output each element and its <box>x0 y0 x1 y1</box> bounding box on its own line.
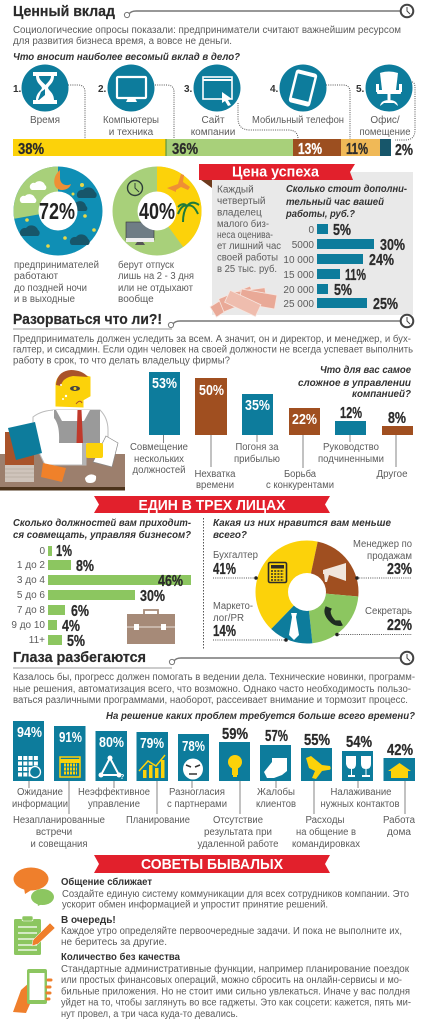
icon: palm <box>178 203 199 222</box>
question: Что для вас самое <box>320 364 411 376</box>
bar chart: positions: 30% <box>140 588 165 605</box>
question: Сколько стоит дополни- <box>286 183 407 195</box>
icon: hand holding phone <box>13 969 51 1013</box>
bar chart: hour price: 0 <box>308 225 314 236</box>
section: eyes wander <box>12 649 416 850</box>
icon: fist <box>264 758 287 778</box>
stacked share bar: 36% <box>172 141 198 158</box>
bar chart: problems: управление <box>88 799 140 810</box>
item 2: computers <box>98 64 159 138</box>
label: accountant <box>213 550 258 580</box>
icon: clipboard with pencil <box>14 916 55 955</box>
bar chart: hour price: 25 000 <box>283 299 314 310</box>
heading: Ценный вклад: Ценный вклад <box>13 3 115 20</box>
label: sales manager <box>353 539 412 580</box>
tip: prioritise <box>14 915 402 955</box>
label: sales manager: Менеджер по <box>353 539 412 550</box>
tip: quantity without quality: нут провел, а три часа куда-то девались. <box>61 1009 238 1020</box>
bar chart: positions: 46% <box>158 573 183 590</box>
bar chart: problems: Налаживание <box>330 787 392 798</box>
bar chart: problems <box>12 721 415 850</box>
item 1: time <box>13 64 68 126</box>
item 3: website <box>184 64 240 138</box>
bar chart: problems: информации <box>12 798 68 810</box>
item 5: office <box>356 64 412 138</box>
bar chart: problems: встречи <box>36 827 72 838</box>
bar chart: hardest in management: Совмещение <box>130 442 188 453</box>
label: sales manager: продажам <box>367 551 412 562</box>
item 5: office: Офис/ <box>370 114 400 126</box>
tip: quantity without quality: бильные приложения. Но не стоит ими сильно увлекаться. Иначе у вас полдня <box>61 986 410 998</box>
bar chart: hour price: 25% <box>373 296 398 313</box>
bar chart: hardest in management: должностей <box>132 465 186 476</box>
side note: Каждый <box>217 184 254 196</box>
label: secretary: 22% <box>387 617 412 634</box>
icon: megaphone <box>323 563 346 582</box>
intro text: Социологические опросы показали: предприниматели считают важнейшим ресурсом <box>13 25 401 36</box>
icon: phone <box>325 607 342 625</box>
icon: grid with clock <box>18 758 40 778</box>
bar chart: problems: 57% <box>265 728 288 745</box>
bar chart: positions: 1% <box>56 543 72 560</box>
bar chart: problems: с партнерами <box>167 799 227 810</box>
ribbon heading <box>199 164 355 188</box>
question <box>213 517 391 541</box>
item 3: website: 3. <box>184 84 193 95</box>
bar chart: hardest in management: 22% <box>292 411 317 428</box>
donut: 40% short vacations <box>112 166 202 305</box>
intro text: ваться различными программами, наоборот, рассеивает внимание и тормозит процесс. <box>13 694 408 706</box>
banner: one in three faces <box>94 496 330 514</box>
bar chart: positions: 8% <box>76 558 94 575</box>
icon: calculator <box>268 562 286 582</box>
tip: communication: Общение сближает <box>61 876 152 888</box>
bar chart: positions: 9 до 10 <box>11 620 45 631</box>
label: sales manager: 23% <box>387 561 412 578</box>
section: valuable contribution <box>13 3 415 159</box>
bar chart: positions: 0 <box>39 546 45 557</box>
item 2: computers: 2. <box>98 84 107 95</box>
intro text <box>13 671 415 706</box>
bar chart: hour price: 5% <box>333 222 351 239</box>
caption: до поздней ночи <box>14 283 87 294</box>
icon: plane <box>306 756 331 779</box>
item 3: website: Сайт <box>201 115 225 126</box>
icon: briefcase <box>127 610 175 644</box>
icon: house <box>388 763 411 778</box>
intro text <box>13 25 401 47</box>
bar chart: positions: 4% <box>62 618 80 635</box>
value 40%: 40% <box>139 198 175 224</box>
icon: office chair <box>376 72 402 106</box>
donut chart: roles <box>255 540 358 643</box>
bar chart: problems: Незапланированные <box>13 815 105 826</box>
tip: communication: Создайте единую систему коммуникации для всех сотрудников компании. Это <box>62 889 409 900</box>
bar chart: hour price <box>283 222 405 313</box>
question: ся совмещать, управляя бизнесом? <box>13 529 192 541</box>
intro text: работу в срок, то что делать владельцу фирмы? <box>13 354 230 366</box>
bar chart: hardest in management: Погоня за <box>236 442 279 453</box>
label: secretary <box>335 606 412 636</box>
caption: и в выходные <box>14 294 75 305</box>
icon: tie <box>289 613 299 640</box>
tip: quantity without quality: Стандартные административные функции, например планирование поездок <box>61 963 410 975</box>
bar chart: hour price: 5% <box>334 282 352 299</box>
panel: price of success <box>199 164 413 317</box>
bar chart: problems: результата при <box>204 827 272 838</box>
icon: moon <box>54 170 71 190</box>
bar chart: problems: Неэффективное <box>78 786 150 798</box>
item 5: office: помещение <box>360 127 411 138</box>
side note <box>217 184 281 275</box>
timeline line with clock <box>13 652 413 668</box>
bar chart: problems: 91% <box>59 729 82 746</box>
icons: clouds and stars <box>20 181 97 248</box>
bar chart: problems: командировках <box>292 839 360 850</box>
caption: или не отдыхают <box>118 283 193 294</box>
label: accountant: Бухгалтер <box>213 550 258 561</box>
bar chart: problems: нужных контактов <box>320 799 400 810</box>
intro text <box>13 333 413 366</box>
bar chart: hour price: 30% <box>380 237 405 254</box>
section: torn apart <box>0 311 413 491</box>
side note: владелец <box>217 208 262 218</box>
bar chart: hardest in management <box>130 372 413 491</box>
bar chart: problems: 59% <box>222 726 248 743</box>
bar chart: problems: 55% <box>304 732 330 749</box>
tip: prioritise: не беритесь за другие. <box>61 936 167 948</box>
bar chart: positions: 5 до 6 <box>17 590 45 601</box>
bar chart: hardest in management: 50% <box>199 382 224 399</box>
bar chart: problems: Отсутствие <box>213 815 263 826</box>
icon: wine glasses <box>346 756 371 777</box>
heading: Разорваться что ли?!: Разорваться что ли?! <box>13 311 162 328</box>
icon: light bulb <box>228 755 242 777</box>
value 72%: 72% <box>39 198 75 224</box>
intro text: для развития бизнеса время, а вовсе не деньги. <box>13 35 232 47</box>
bar chart: hour price: 10 000 <box>283 255 314 266</box>
heading: Глаза разбегаются: Глаза разбегаются <box>13 649 146 666</box>
bar chart: problems: на общение в <box>296 826 356 838</box>
icon: calendar <box>60 757 80 777</box>
caption: вообще <box>118 293 154 305</box>
timeline line with clock <box>13 315 413 329</box>
bar chart: hardest in management: нескольких <box>134 454 184 465</box>
bar chart: positions: 6% <box>71 603 89 620</box>
label: marketing <box>213 601 288 642</box>
bar chart: problems: 80% <box>99 734 124 751</box>
tip: communication: ускорит обмен информацией и упростит принятие решений. <box>62 898 328 910</box>
tip: quantity without quality: или простых финансовых операций, можно сбросить на онлайн-сервисы и мо- <box>61 974 402 986</box>
divider dotted <box>202 518 204 650</box>
bar chart: hardest in management: прибылью <box>234 453 280 465</box>
question: тельный час вашей <box>286 196 385 208</box>
bar chart: positions: 1 до 2 <box>17 560 45 571</box>
banner: one in three faces: ЕДИН В ТРЕХ ЛИЦАХ <box>138 497 286 514</box>
icon: monitor <box>117 77 146 102</box>
side note: ет лишний час <box>217 241 281 252</box>
caption <box>118 259 194 305</box>
icon: growth chart <box>139 755 165 778</box>
caption: предпринимателей <box>14 260 99 271</box>
question: Сколько должностей вам приходит- <box>13 517 191 529</box>
tip: communication <box>14 868 409 910</box>
item 2: computers: и техника <box>109 127 154 138</box>
item 2: computers: Компьютеры <box>103 115 159 126</box>
question <box>298 364 412 400</box>
side note: своей работы <box>217 252 278 264</box>
question: сложное в управлении <box>298 377 412 389</box>
icon: banknotes <box>210 286 277 317</box>
bar chart: problems: клиентов <box>256 799 296 810</box>
intro text: галтер, и сисадмин. Если один человек на своей должности не всегда успевает выполнить <box>13 344 413 356</box>
bar chart: hour price: 24% <box>369 252 394 269</box>
icon: hourglass <box>33 72 57 104</box>
stacked share bar <box>13 139 413 159</box>
tip: prioritise: Каждое утро определяйте первоочередные задачи. И пока не выполните их, <box>61 926 402 937</box>
bar chart: hardest in management: Другое <box>376 469 408 480</box>
banner: veterans' advice: СОВЕТЫ БЫВАЛЫХ <box>141 856 283 873</box>
dotted connectors <box>68 82 415 140</box>
caption: берут отпуск <box>118 259 175 271</box>
bar chart: problems: удаленной работе <box>198 838 279 850</box>
bar chart: hardest in management: Руководство <box>323 442 379 453</box>
item 4: mobile phone: 4. <box>270 84 279 95</box>
icon: triangle: ? <box>120 774 124 781</box>
bar chart: hour price: 15 000 <box>283 270 314 281</box>
bar chart: positions <box>11 543 191 650</box>
question <box>13 517 192 541</box>
side note: малого биз- <box>217 218 269 230</box>
question: компанией? <box>352 388 412 400</box>
label: marketing: лог/PR <box>213 613 244 624</box>
item 5: office: 5. <box>356 84 365 95</box>
bar chart: problems: Планирование <box>126 815 190 826</box>
label: marketing: 14% <box>213 623 236 640</box>
bar chart: hardest in management: 53% <box>152 375 177 392</box>
bar chart: problems: 78% <box>182 738 205 755</box>
question: Что вносит наиболее весомый вклад в дело? <box>13 51 241 63</box>
item 4: mobile phone: Мобильный телефон <box>252 114 344 126</box>
bar chart: problems: и совещания <box>30 839 88 850</box>
icon: browser window with cursor <box>203 77 232 106</box>
tip: prioritise: В очередь! <box>61 915 116 926</box>
bar chart: problems: Ожидание <box>17 787 63 798</box>
bar chart: problems: 94% <box>17 724 42 741</box>
bar chart: hour price: 11% <box>345 267 366 284</box>
side note: четвертый <box>217 196 265 207</box>
item 4: mobile phone <box>252 64 344 126</box>
question <box>285 183 407 220</box>
caption <box>14 260 99 305</box>
side note: неса оценива- <box>217 230 273 241</box>
bar chart: problems: Работа <box>383 814 415 826</box>
bar chart: hardest in management: Нехватка <box>194 469 236 480</box>
question: работы, руб.? <box>285 208 356 220</box>
panel: number of positions <box>11 517 192 650</box>
side note: в 25 тыс. руб. <box>217 263 277 275</box>
bar chart: hour price: 5000 <box>292 240 314 251</box>
icon: triangle <box>98 756 124 781</box>
bar chart: problems: Разногласия <box>169 787 225 798</box>
bar chart: hardest in management: Борьба <box>284 468 316 480</box>
caption: лишь на 2 - 3 дня <box>118 271 194 282</box>
intro text: Казалось бы, прогресс должен помогать в ведении дела. Технические новинки, программ- <box>13 671 415 683</box>
label: marketing: Маркето- <box>213 601 253 612</box>
item 1: time: 1. <box>13 84 22 95</box>
bar chart: problems: дома <box>387 827 411 838</box>
bar chart: hardest in management: подчиненными <box>318 454 384 465</box>
stacked share bar: 11% <box>346 141 368 158</box>
icon: plane <box>167 174 190 192</box>
bar chart: problems: 54% <box>346 734 372 751</box>
tip: quantity without quality <box>13 951 411 1020</box>
icon: smartphone <box>288 69 318 107</box>
bar chart: problems: Расходы <box>306 815 344 826</box>
bar chart: hardest in management: с конкурентами <box>266 480 334 491</box>
bar chart: hardest in management: 8% <box>388 410 406 427</box>
banner: veterans' advice <box>94 855 330 873</box>
item 1: time: Время <box>30 115 60 126</box>
bar chart: hardest in management: времени <box>196 480 234 491</box>
bar chart: hardest in management: 35% <box>245 397 270 414</box>
icon: clock <box>128 180 142 196</box>
bar chart: positions: 3 до 4 <box>17 575 45 586</box>
label: accountant: 41% <box>213 561 236 578</box>
bar chart: positions: 7 до 8 <box>17 605 45 616</box>
tip: quantity without quality: Количество без качества <box>61 951 180 963</box>
stacked share bar: 2% <box>395 142 413 159</box>
bar chart: positions: 11+ <box>29 635 45 646</box>
icon: chat bubbles <box>14 868 54 906</box>
caption: работают <box>14 270 59 282</box>
stacked share bar: 38% <box>18 141 44 158</box>
stacked share bar: 13% <box>298 141 322 158</box>
bar chart: problems: Жалобы <box>257 786 295 798</box>
label: secretary: Секретарь <box>365 606 412 617</box>
illustration: overworked person at desk <box>0 370 125 490</box>
item 3: website: компании <box>191 127 235 138</box>
timeline line with clock <box>124 5 413 18</box>
bar chart: hour price: 20 000 <box>283 285 314 296</box>
intro text: ные решения, автоматизация всего, что возможно. Однако часто необходимость пользо- <box>13 683 411 695</box>
ribbon heading: Цена успеха <box>232 164 320 180</box>
question: всего? <box>213 529 248 541</box>
bar chart: hardest in management: 12% <box>340 405 362 422</box>
intro text: Предприниматель должен уследить за всем. А значит, он и директор, и менеджер, и бух- <box>13 333 411 345</box>
question: Какая из них нравится вам меньше <box>213 517 391 529</box>
bar chart: problems: 79% <box>140 735 164 752</box>
bar chart: positions: 5% <box>67 633 85 650</box>
panel: least liked role <box>213 517 412 643</box>
icon: monitor <box>126 222 154 245</box>
icon: angry face <box>183 758 203 780</box>
donut: 72% entrepreneurs work nights <box>14 166 102 305</box>
bar chart: problems: 42% <box>387 742 413 759</box>
